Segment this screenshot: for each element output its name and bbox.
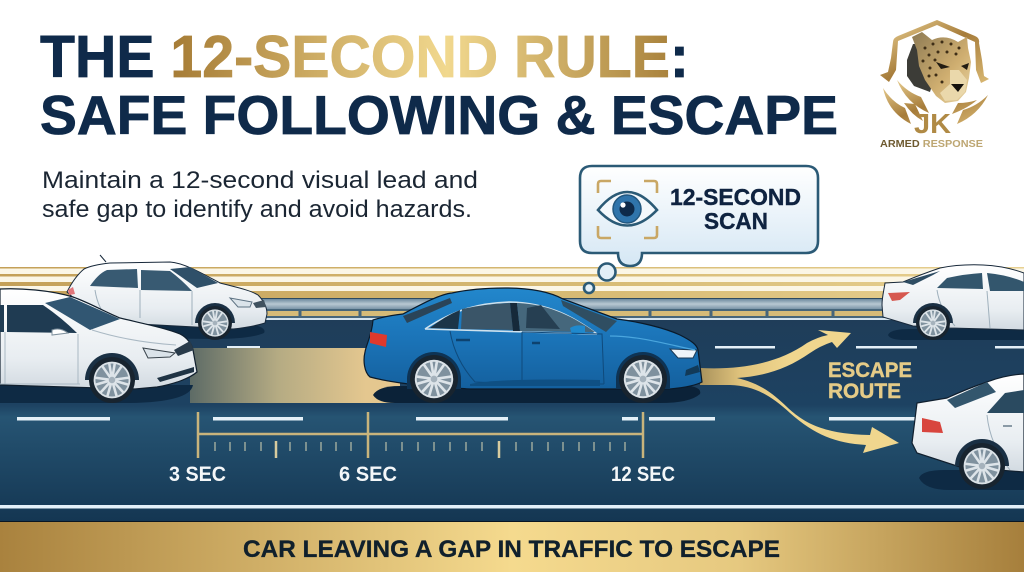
timeline ruler [198, 412, 643, 458]
white car: upper right [882, 265, 1024, 340]
escape route label: ESCAPE [828, 359, 912, 382]
scan speech bubble [580, 166, 818, 293]
white car: lower right [912, 374, 1024, 490]
guardrail [0, 298, 1024, 320]
footer caption: CAR LEAVING A GAP IN TRAFFIC TO ESCAPE [243, 536, 780, 563]
title [40, 24, 838, 146]
thought bubble dots [584, 264, 616, 293]
lane markings [0, 346, 1024, 508]
following gap highlight [190, 348, 400, 403]
timeline labels [169, 463, 675, 486]
icon: eye scan [598, 181, 657, 238]
road [0, 320, 1024, 522]
blue car: main vehicle [364, 288, 702, 403]
escape route label [828, 359, 912, 403]
bubble label [670, 184, 801, 234]
white car: front left [0, 289, 197, 403]
subtitle: safe gap to identify and avoid hazards. [42, 196, 472, 223]
escape route label: ROUTE [828, 380, 901, 403]
escape route arrows [700, 330, 899, 453]
background gold stripes [0, 267, 1024, 298]
title: SAFE FOLLOWING & ESCAPE [40, 84, 838, 146]
bubble label: SCAN [704, 208, 768, 234]
logo: JK Armed Response: ARMED RESPONSE [880, 138, 983, 150]
white car: rear left [67, 255, 267, 340]
logo: JK Armed Response [880, 20, 989, 150]
timeline labels: 6 SEC [339, 463, 397, 486]
subtitle [42, 167, 478, 223]
bubble label: 12-SECOND [670, 184, 801, 210]
title: THE 12-SECOND RULE: [40, 24, 689, 90]
footer banner [0, 522, 1024, 572]
road bottom edge line [0, 521, 1024, 522]
timeline labels: 3 SEC [169, 463, 226, 486]
timeline labels: 12 SEC [611, 463, 675, 486]
logo: JK Armed Response: JK [914, 108, 951, 139]
subtitle: Maintain a 12-second visual lead and [42, 167, 478, 194]
